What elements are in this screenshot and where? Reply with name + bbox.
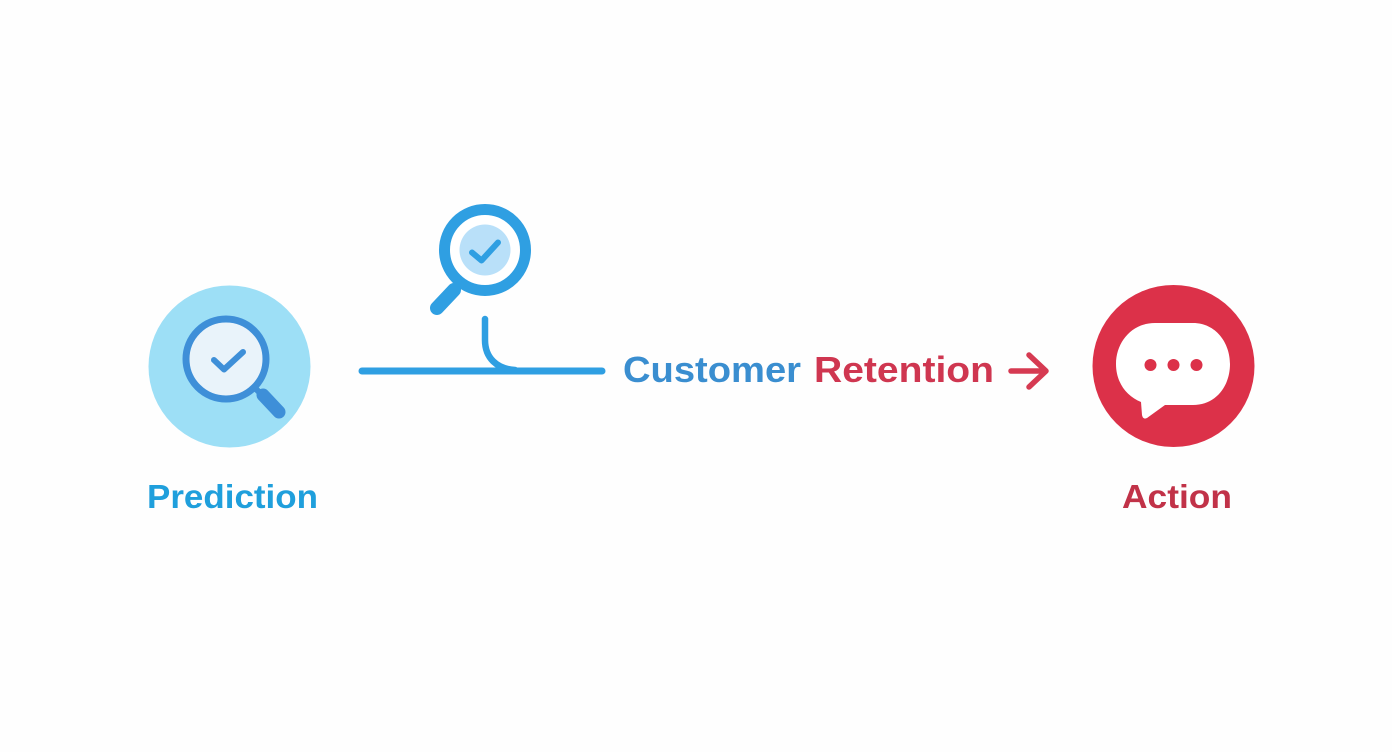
- icon: chat bubble in circle: [1092, 285, 1254, 447]
- panel: action: [1092, 285, 1254, 515]
- icon: magnifier with check: [437, 210, 526, 308]
- panel: connector with magnifier: [362, 210, 602, 371]
- arrow: [1011, 355, 1046, 387]
- connector line: [362, 319, 602, 371]
- label: Customer: Customer: [623, 349, 801, 390]
- label: Action: Action: [1122, 478, 1232, 515]
- panel: prediction: [147, 286, 318, 515]
- label: Retention: Retention: [814, 349, 994, 390]
- label: Prediction: Prediction: [147, 478, 318, 515]
- icon: prediction magnifier in circle: [148, 286, 310, 448]
